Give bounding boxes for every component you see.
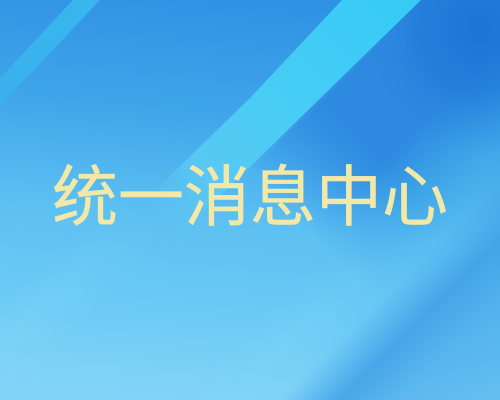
upper right medium blue diagonal [268, 40, 461, 250]
narrow light diagonal band [0, 0, 100, 106]
wide light diagonal band [130, 0, 421, 235]
title: 统一消息中心 [52, 160, 448, 234]
